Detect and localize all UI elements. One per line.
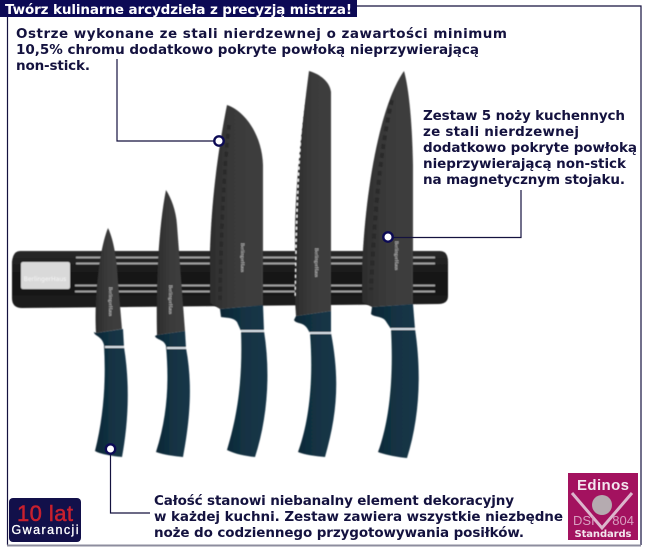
knife 1: BerlingerHaus	[107, 287, 112, 316]
knife 3: BerlingerHaus	[239, 243, 244, 272]
text block: blade description: 10,5% chromu dodatkowo pokryte powłoką nieprzywierającą	[16, 42, 479, 58]
text block: set summary: noże do codziennego przygotowywania posiłków.	[154, 525, 524, 541]
knife 5	[362, 71, 419, 458]
text block: blade description: Ostrze wykonane ze stali nierdzewnej o zawartości minimum	[16, 26, 507, 42]
badge: Edinos standards: Standards	[574, 529, 632, 540]
text block: blade description: non-stick.	[16, 58, 90, 74]
text block: set description: nieprzywierającą non-stick	[423, 156, 627, 172]
badge: 10 year warranty	[9, 498, 81, 542]
knife 4	[294, 71, 336, 457]
text block: set description	[423, 108, 637, 188]
text block: blade description	[16, 26, 507, 74]
badge: Edinos standards: 804	[612, 513, 634, 528]
callout: handle leader	[106, 444, 150, 513]
knife 2	[155, 190, 190, 457]
text block: set description: ze stali nierdzewnej	[423, 124, 579, 140]
knife 4: BerlingerHaus	[313, 248, 318, 277]
text block: set description: dodatkowo pokryte powłoką	[423, 140, 637, 156]
badge: Edinos standards	[568, 473, 638, 540]
bar label plate: BerlingerHaus	[24, 276, 66, 283]
text block: set summary	[154, 493, 563, 541]
knife 1	[94, 228, 128, 457]
title banner: Twórz kulinarne arcydzieła z precyzją mistrza!	[5, 2, 352, 18]
knife 3	[210, 105, 267, 457]
knife 5: BerlingerHaus	[393, 241, 398, 270]
badge: Edinos standards: DSI	[573, 513, 595, 528]
magnetic bar	[12, 251, 448, 308]
text block: set description: Zestaw 5 noży kuchennych	[423, 108, 625, 124]
badge: 10 year warranty: Gwarancji	[12, 523, 78, 537]
callout: set leader	[383, 190, 521, 242]
bar label plate	[21, 262, 70, 289]
callout: blade leader	[117, 59, 224, 146]
text block: set summary: Całość stanowi niebanalny element dekoracyjny	[154, 493, 514, 509]
text block: set description: na magnetycznym stojaku.	[423, 172, 625, 188]
text block: set summary: w każdej kuchni. Zestaw zawiera wszystkie niezbędne	[154, 509, 563, 525]
badge: Edinos standards: Edinos	[577, 477, 629, 494]
knife 2: BerlingerHaus	[167, 285, 172, 314]
badge: 10 year warranty: 10 lat	[17, 501, 73, 526]
